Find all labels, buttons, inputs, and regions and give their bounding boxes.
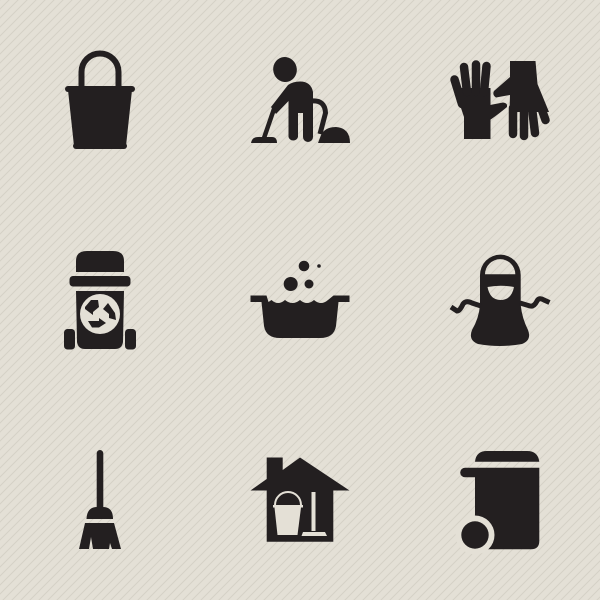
icon: recycling bin — [64, 251, 136, 350]
icon: person vacuuming — [251, 54, 350, 143]
icon: bucket — [65, 54, 135, 149]
icon: wash basin with bubbles — [250, 261, 350, 338]
icon: house with bucket and mop — [250, 458, 350, 542]
icon: mop inside house — [302, 492, 327, 536]
icon: broom — [79, 450, 121, 549]
icon: wheelie trash bin — [456, 451, 539, 554]
icon: recycling arrows — [85, 300, 116, 328]
icon: apron — [451, 255, 550, 346]
icon: rubber gloves — [454, 61, 549, 139]
icon: bucket inside house — [273, 492, 303, 535]
